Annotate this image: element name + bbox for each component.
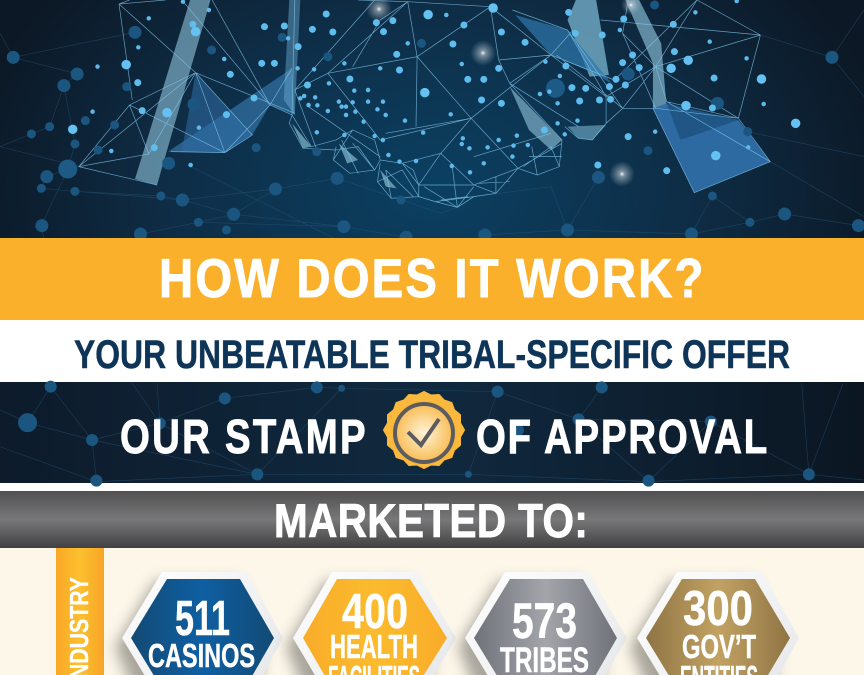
hexagon: 573 tribes: 573 [512, 593, 577, 649]
hexagon: 511 casinos [115, 572, 283, 675]
hexagon: 511 casinos: CASINOS [148, 637, 255, 674]
heading band: marketed to: MARKETED TO: [274, 495, 588, 548]
hexagon: 400 health facilities: HEALTH [330, 628, 418, 665]
dark nodes [13, 32, 858, 237]
bright nodes large [73, 8, 796, 156]
bright nodes medium [138, 12, 714, 171]
panel: stamp of approval band [0, 382, 864, 483]
subheading: unbeatable offer [0, 320, 864, 381]
background network lines [0, 10, 864, 240]
hexagon: 300 government entities [630, 572, 799, 675]
industry side tab [56, 548, 104, 675]
heading band: marketed to [0, 491, 864, 548]
hexagon: 400 health facilities: 400 [342, 585, 408, 639]
heading band: how does it work: HOW DOES IT WORK? [159, 248, 703, 309]
panel: hero network illustration [0, 0, 864, 240]
hexagon: 573 tribes [458, 572, 627, 675]
light flares [366, 0, 641, 187]
wireframe mesh [79, 0, 770, 207]
bright nodes small [93, 1, 764, 172]
hexagon: 511 casinos: 511 [175, 592, 230, 646]
stamp heading right: OF APPROVAL [476, 411, 767, 464]
hexagon: 400 health facilities [286, 572, 456, 675]
hexagon: 300 government entities: 300 [683, 582, 753, 636]
panel: industry cream area [0, 548, 864, 675]
icon: approval seal [384, 392, 464, 468]
heading band: how does it work [0, 238, 864, 320]
hexagon: 300 government entities: GOV’T [682, 628, 756, 665]
stamp heading left: OUR STAMP [120, 411, 366, 464]
translucent facets [135, 0, 210, 185]
